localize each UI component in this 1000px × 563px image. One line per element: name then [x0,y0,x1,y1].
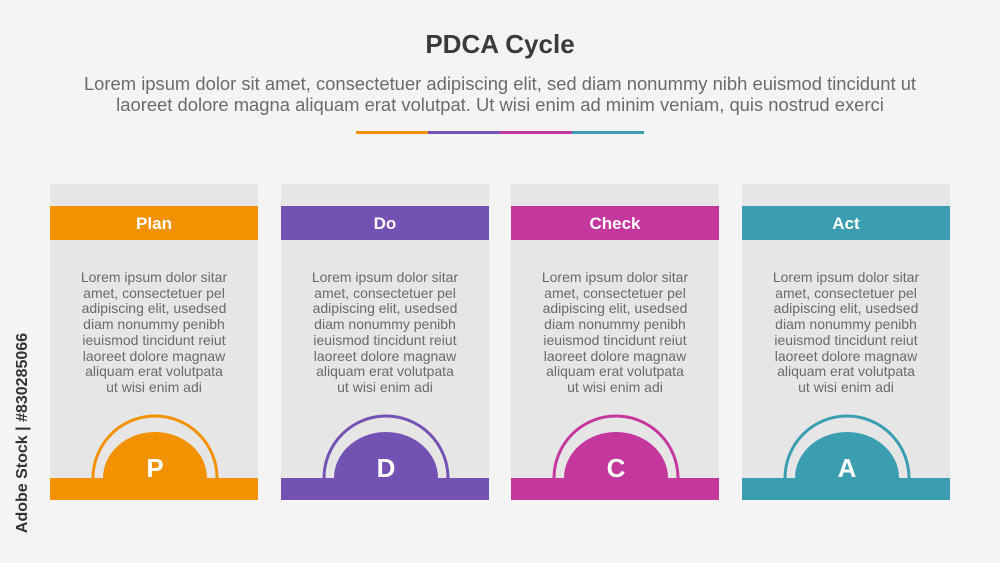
header: do: Do [374,214,396,233]
watermark: Adobe Stock | #830285066 [14,333,31,533]
text: act: Lorem ipsum dolor sitar [773,269,919,285]
text: act: amet, consectetuer pel [775,285,917,301]
text: do: ut wisi enim adi [337,379,433,395]
text: do: aliquam erat volutpata [316,363,454,379]
header: act [742,206,950,240]
text: do: Lorem ipsum dolor sitar [312,269,458,285]
text: do: adipiscing elit, usedsed [313,300,457,316]
text: plan: laoreet dolore magnaw [83,348,225,364]
icon: D half circle: D [377,453,395,483]
text: act: laoreet dolore magnaw [775,348,917,364]
icon: P half circle: P [146,453,164,483]
header: check: Check [589,214,641,233]
text: do: laoreet dolore magnaw [314,348,456,364]
subtitle: laoreet dolore magna aliquam erat volutpat. Ut wisi enim ad minim veniam, quis nostrud exerci [116,94,884,115]
text: plan: adipiscing elit, usedsed [82,300,226,316]
text: do: diam nonummy penibh [314,316,456,332]
text: plan: Lorem ipsum dolor sitar [81,269,227,285]
header: plan: Plan [136,214,172,233]
text: check: ieuismod tincidunt reiut [543,332,687,348]
icon: C half circle: C [607,453,626,483]
text: act: adipiscing elit, usedsed [774,300,918,316]
text: plan: amet, consectetuer pel [83,285,225,301]
icon: A half circle [784,414,910,483]
text: do [312,269,458,395]
panel: do [281,184,489,500]
text: check [542,269,688,395]
title: PDCA Cycle [425,29,575,59]
header: plan [50,206,258,240]
icon: C half circle [552,414,680,483]
text: check: amet, consectetuer pel [544,285,686,301]
subtitle: Lorem ipsum dolor sit amet, consectetuer adipiscing elit, sed diam nonummy nibh euismod tincidunt ut [84,73,916,94]
text: plan: ut wisi enim adi [106,379,202,395]
text: do: amet, consectetuer pel [314,285,456,301]
text: plan [81,269,227,395]
text: check: laoreet dolore magnaw [544,348,686,364]
header: act: Act [832,214,860,233]
text: plan: ieuismod tincidunt reiut [82,332,226,348]
icon: A half circle: A [838,453,857,483]
text: check: ut wisi enim adi [567,379,663,395]
panel: check [511,184,719,500]
panel: act [742,184,950,500]
subtitle [84,73,916,115]
text: plan: diam nonummy penibh [83,316,225,332]
header: check [511,206,719,240]
color divider [356,131,644,134]
text: act: ut wisi enim adi [798,379,894,395]
icon: P half circle [92,414,218,483]
text: act: aliquam erat volutpata [777,363,915,379]
text: check: Lorem ipsum dolor sitar [542,269,688,285]
icon: D half circle [322,414,450,483]
text: plan: aliquam erat volutpata [85,363,223,379]
text: check: diam nonummy penibh [544,316,686,332]
text: act [773,269,919,395]
text: do: ieuismod tincidunt reiut [313,332,457,348]
text: check: adipiscing elit, usedsed [543,300,687,316]
text: check: aliquam erat volutpata [546,363,684,379]
text: act: diam nonummy penibh [775,316,917,332]
header: do [281,206,489,240]
text: act: ieuismod tincidunt reiut [774,332,918,348]
panel: plan [50,184,258,500]
